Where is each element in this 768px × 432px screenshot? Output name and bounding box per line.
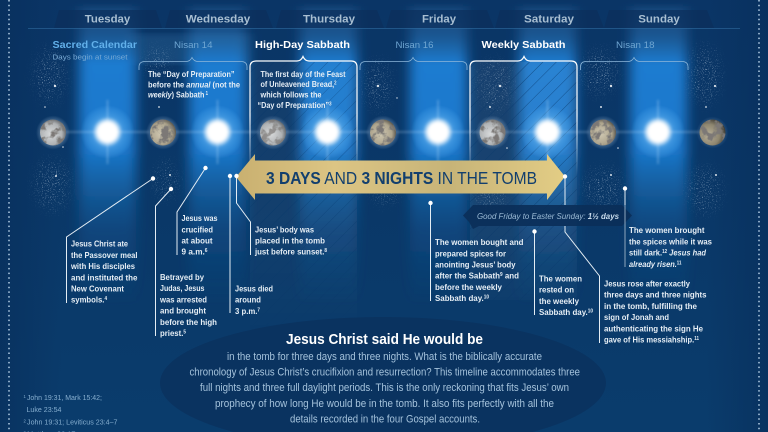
leader: women rested: [532, 229, 593, 317]
leader: crucified: crucified: [182, 224, 213, 234]
leader: women rested: the weekly: [539, 296, 579, 306]
sacred calendar heading: Days begin at sunset: [52, 52, 128, 62]
leader: women brought spices: the spices while it was: [629, 236, 712, 246]
high-day sabbath panel: [250, 39, 357, 175]
weekly sabbath panel: [470, 39, 577, 175]
leader: women rested: 10: [588, 308, 593, 314]
high-day sabbath panel: of Unleavened Bread,: [260, 79, 346, 89]
day header tabs: Friday: [422, 14, 457, 26]
tomb arrow: [236, 154, 565, 200]
leader: died: around: [235, 295, 261, 305]
leader: crucified: at about: [182, 236, 213, 246]
day header tabs: Sunday: [638, 14, 681, 26]
leader: jesus rose: 11: [694, 336, 699, 342]
leader: betrayed: before the high: [160, 317, 217, 327]
leader: betrayed: [156, 187, 217, 338]
leader: women prepared spices: after the Sabbath: [435, 271, 503, 281]
leader: burial: just before sunset.: [255, 247, 329, 257]
leader: passover: New Covenant: [71, 284, 124, 294]
day header tabs: [28, 10, 740, 28]
leader: died: 3 p.m.: [235, 306, 259, 316]
day of preparation text: [148, 69, 240, 100]
leader: women brought spices: [623, 186, 712, 269]
day header tabs: Saturday: [524, 14, 575, 26]
footnotes: 1: [24, 394, 27, 399]
sacred calendar heading: [52, 39, 137, 62]
leader: jesus rose: sign of Jonah and: [604, 312, 669, 322]
duration pill: Good Friday to Easter Sunday: 1½ days: [477, 211, 619, 221]
leader: women prepared spices: The women bought and: [435, 237, 524, 247]
leader: died: [228, 174, 273, 316]
leader: women rested: rested on: [539, 285, 574, 295]
leader: burial: 8: [324, 248, 327, 254]
leader: women prepared spices: prepared spices for: [435, 248, 507, 258]
star clouds: [29, 41, 726, 218]
tomb arrow: 3 DAYS AND 3 NIGHTS IN THE TOMB: [266, 168, 537, 188]
summary text: prophecy of how long He would be in the tomb. It also fits perfectly with all the: [215, 398, 554, 410]
day header tabs: Thursday: [303, 14, 356, 26]
summary text: full nights and three full daylight periods. This is the only reckoning that fits Jesus’ own: [200, 382, 569, 394]
summary text: details recorded in the four Gospel accounts.: [290, 414, 480, 426]
leader: crucified: 6: [205, 248, 208, 254]
footnotes: 2: [24, 418, 27, 424]
leader: passover: [66, 176, 155, 305]
leader: betrayed: Judas, Jesus: [160, 283, 205, 293]
high-day sabbath panel: which follows the: [260, 90, 322, 100]
leader: died: 7: [257, 308, 260, 314]
leader: jesus rose: authenticating the sign He: [604, 324, 703, 334]
leader: passover: 4: [104, 296, 107, 302]
leader: passover: the Passover meal: [71, 250, 138, 260]
footnotes: Luke 23:54: [26, 405, 62, 414]
hatched sabbath panels: [250, 62, 577, 262]
duration pill: [463, 205, 632, 229]
nisan labels and brackets: Nisan 18: [616, 40, 654, 51]
leader: burial: [234, 174, 327, 257]
leader: women brought spices: still dark.: [629, 248, 666, 258]
footnotes: John 19:31; Leviticus 23:4–7: [27, 418, 118, 426]
leader: women rested: Sabbath day.: [539, 307, 591, 317]
leader: jesus rose: Jesus rose after exactly: [604, 278, 690, 288]
leader: women brought spices: The women brought: [629, 225, 705, 235]
leader: betrayed: priest.: [160, 328, 185, 338]
nisan labels and brackets: Nisan 14: [174, 40, 212, 51]
summary ellipse: [160, 317, 606, 432]
leader: jesus rose: gave of His messiahship.: [604, 335, 704, 345]
footnotes: John 19:31, Mark 15:42;: [27, 393, 102, 402]
day of preparation text: weekly) Sabbath: [148, 90, 210, 100]
leader: crucified: [177, 166, 218, 257]
high-day sabbath panel: The first day of the Feast: [260, 69, 346, 79]
day of preparation text: 1: [204, 91, 208, 97]
day of preparation text: before the annual (not the: [148, 80, 240, 90]
day header tabs: Tuesday: [85, 14, 131, 26]
leader: women prepared spices: anointing Jesus’ body: [435, 260, 516, 270]
leader: women brought spices: 12: [662, 249, 667, 255]
high-day sabbath panel: 2: [334, 81, 337, 87]
suns: [66, 100, 700, 164]
footnotes: [24, 393, 118, 432]
leader: betrayed: 5: [183, 330, 186, 336]
nisan labels and brackets: [139, 40, 688, 70]
leader: women prepared spices: 10: [484, 295, 489, 301]
leader: women rested: The women: [539, 274, 582, 284]
leader: jesus rose: in the tomb, fulfilling the: [604, 301, 697, 311]
leader: betrayed: Betrayed by: [160, 272, 204, 282]
leader: burial: placed in the tomb: [255, 236, 325, 246]
leader: crucified: 9 a.m.: [182, 247, 205, 257]
leader: women brought spices: already risen.: [629, 259, 677, 269]
day header tabs: Wednesday: [186, 14, 251, 26]
leader: women prepared spices: and: [503, 271, 519, 281]
leader: women prepared spices: [428, 201, 524, 303]
leader: women prepared spices: 9: [500, 272, 503, 278]
leader: crucified: Jesus was: [182, 213, 218, 223]
sacred calendar heading: Sacred Calendar: [52, 39, 137, 51]
summary text: Jesus Christ said He would be: [286, 332, 483, 348]
moons: [36, 116, 728, 150]
leader: women prepared spices: before the weekly: [435, 282, 502, 292]
leader: jesus rose: [563, 174, 707, 345]
high-day sabbath panel: High-Day Sabbath: [255, 39, 350, 51]
leader: betrayed: and brought: [160, 306, 206, 316]
leader: burial: Jesus’ body was: [255, 224, 314, 234]
leader: died: Jesus died: [235, 284, 273, 294]
summary text: [190, 332, 580, 426]
light beams: [79, 6, 687, 306]
summary text: chronology of Jesus Christ’s crucifixion and resurrection? This timeline accommodates three: [190, 367, 580, 379]
summary text: in the tomb for three days and three nights. What is the biblically accurate: [227, 351, 542, 363]
leader: betrayed: was arrested: [159, 294, 207, 304]
leader: passover: Jesus Christ ate: [71, 239, 128, 249]
leader: women prepared spices: Sabbath day.: [435, 293, 487, 303]
high-day sabbath panel: 3: [329, 102, 332, 108]
leader: jesus rose: three days and three nights: [604, 290, 707, 300]
nisan labels and brackets: Nisan 16: [396, 40, 434, 51]
leader: women brought spices: 11: [677, 260, 682, 266]
leader: passover: with His disciples: [70, 261, 135, 271]
leader: passover: and instituted the: [71, 272, 138, 282]
high-day sabbath panel: “Day of Preparation”: [258, 100, 340, 110]
leader: women brought spices: Jesus had: [667, 248, 707, 258]
day of preparation text: The “Day of Preparation”: [148, 69, 234, 79]
leader: passover: symbols.: [71, 295, 107, 305]
weekly sabbath panel: Weekly Sabbath: [482, 39, 566, 51]
